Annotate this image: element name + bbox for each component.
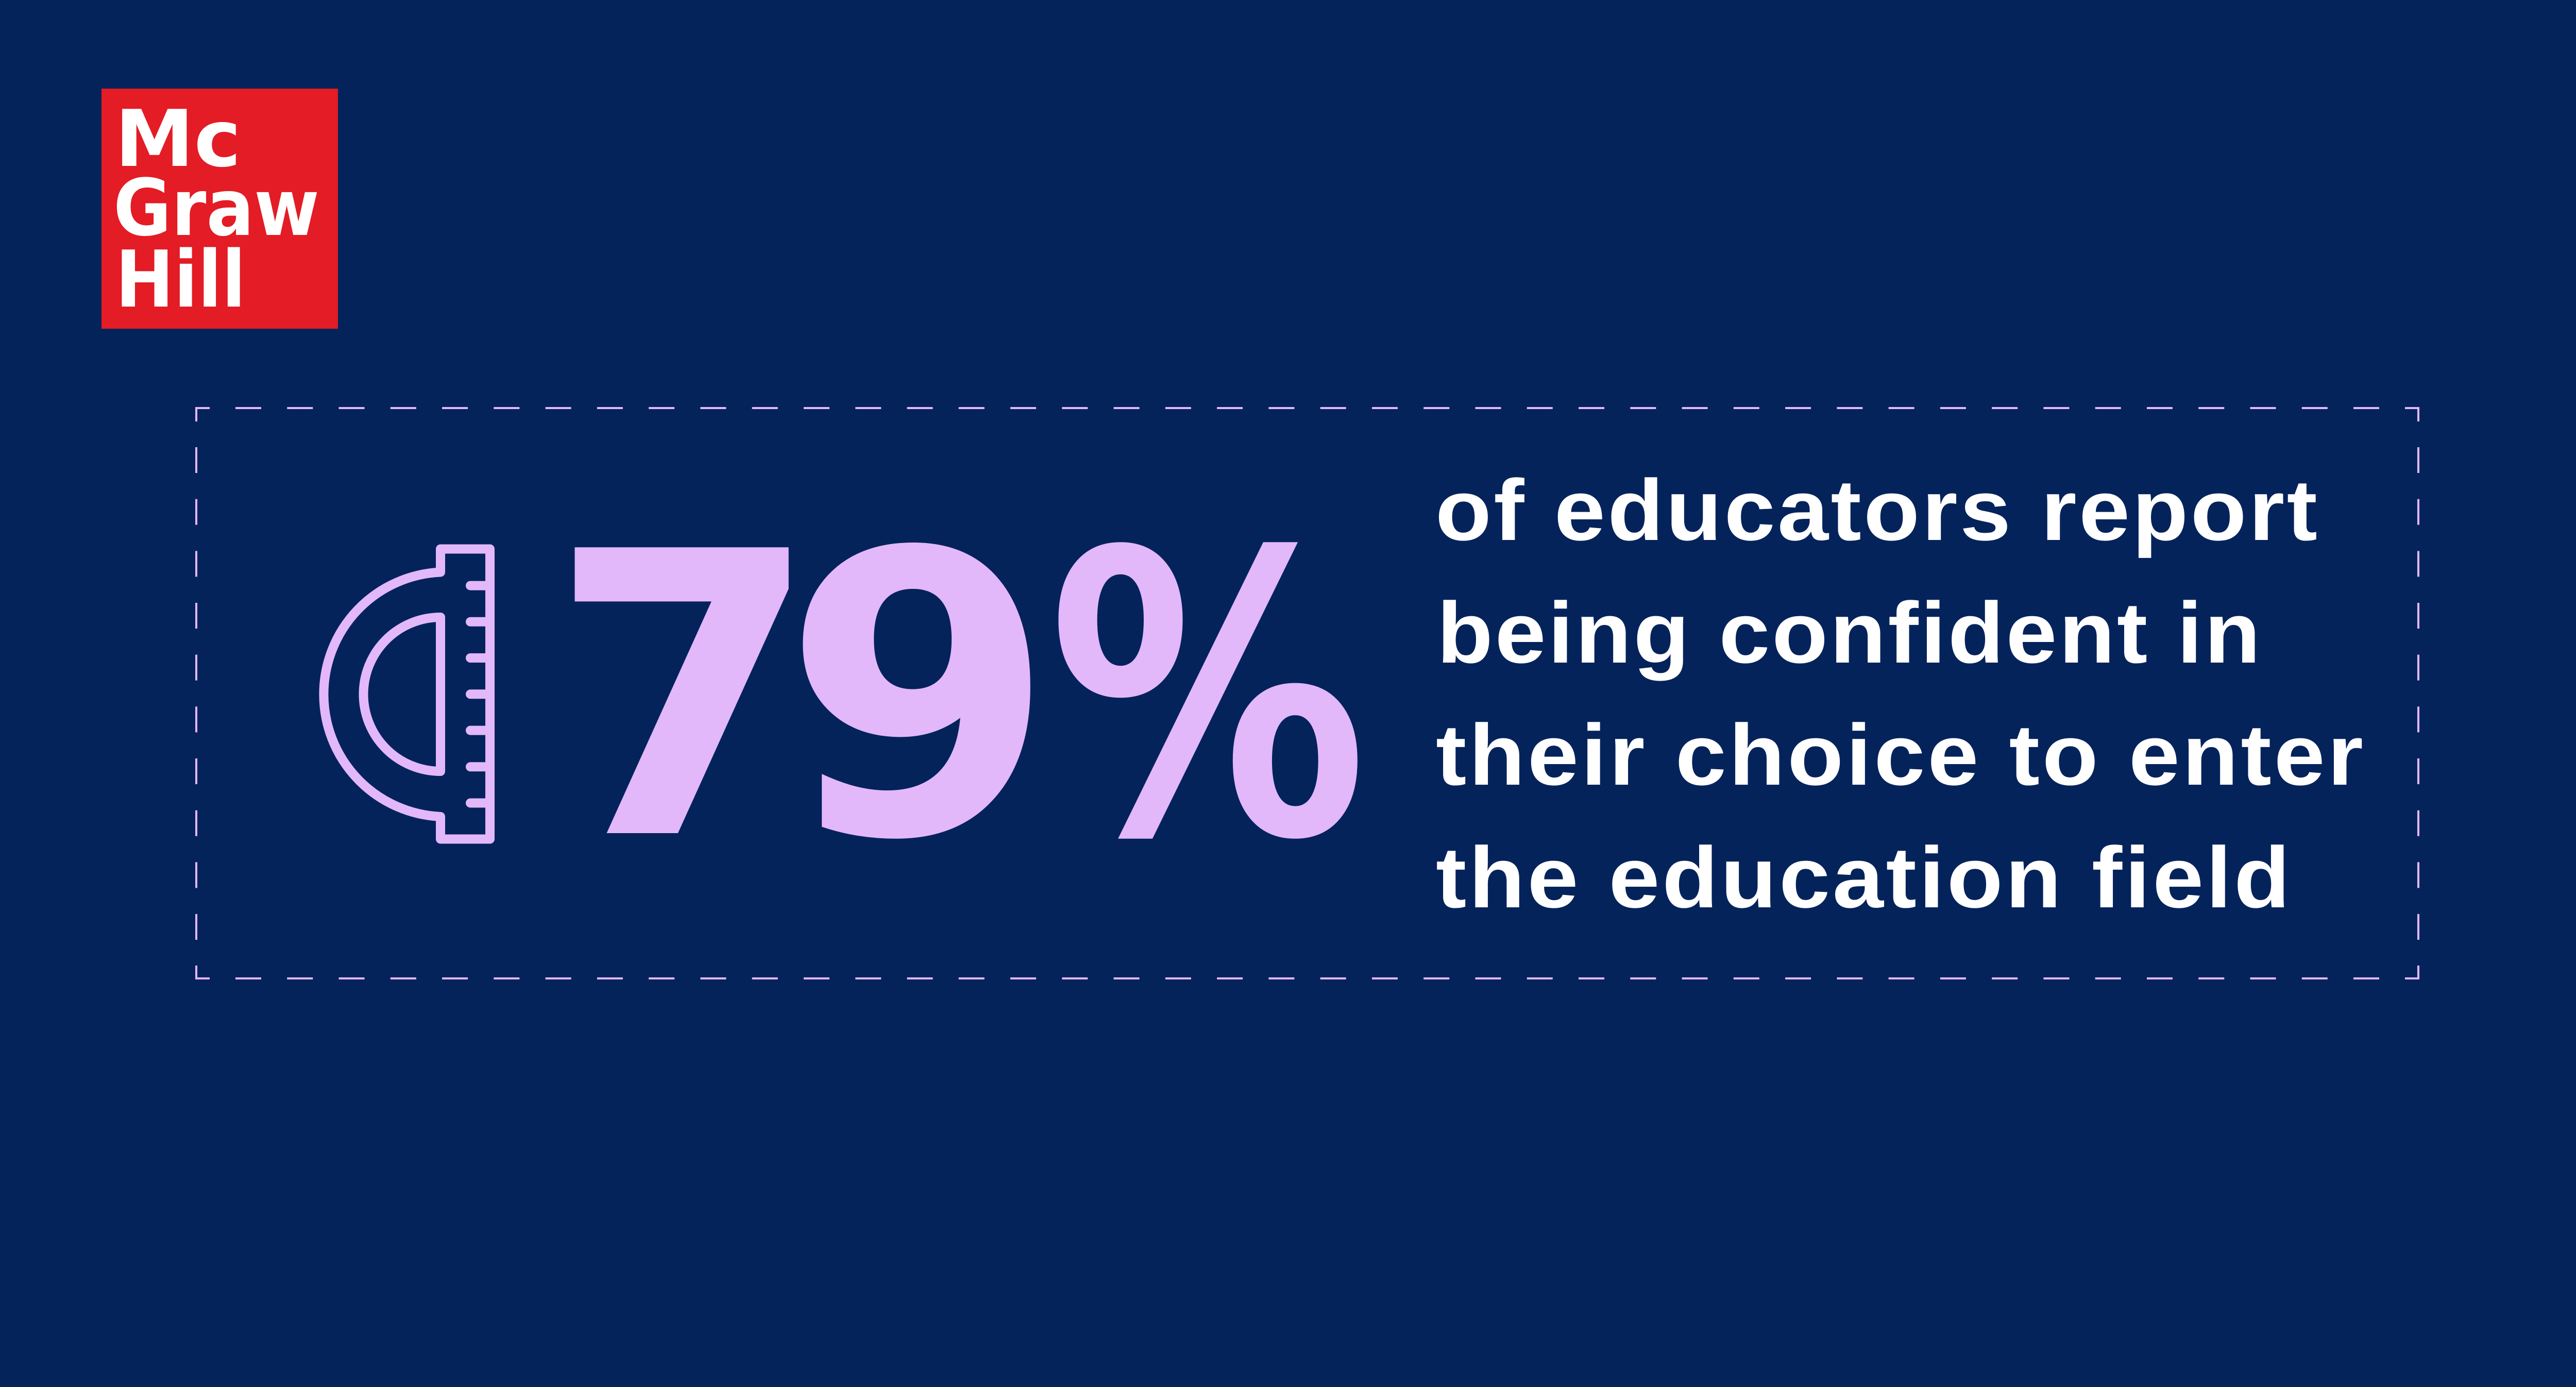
logo: McGraw Hill: Hill	[115, 234, 246, 325]
text block: description: of educators report	[1435, 462, 2317, 559]
text block: description: being confident in	[1437, 584, 2260, 681]
logo: McGraw Hill	[101, 89, 338, 329]
text block: description: their choice to enter	[1436, 706, 2363, 803]
statistic: 79%: %	[1048, 469, 1367, 926]
statistic: 79%: 9	[783, 470, 1056, 926]
logo: McGraw Hill: Graw	[113, 162, 319, 253]
text block: description: the education field	[1436, 829, 2290, 926]
logo: McGraw Hill: Mc	[115, 93, 241, 184]
statistic: 79%	[549, 469, 1367, 926]
text block: description	[1435, 462, 2363, 926]
icon: protractor and ruler	[324, 549, 490, 839]
statistic: 79%: 7	[549, 469, 820, 926]
panel: dashed frame	[196, 408, 2418, 978]
